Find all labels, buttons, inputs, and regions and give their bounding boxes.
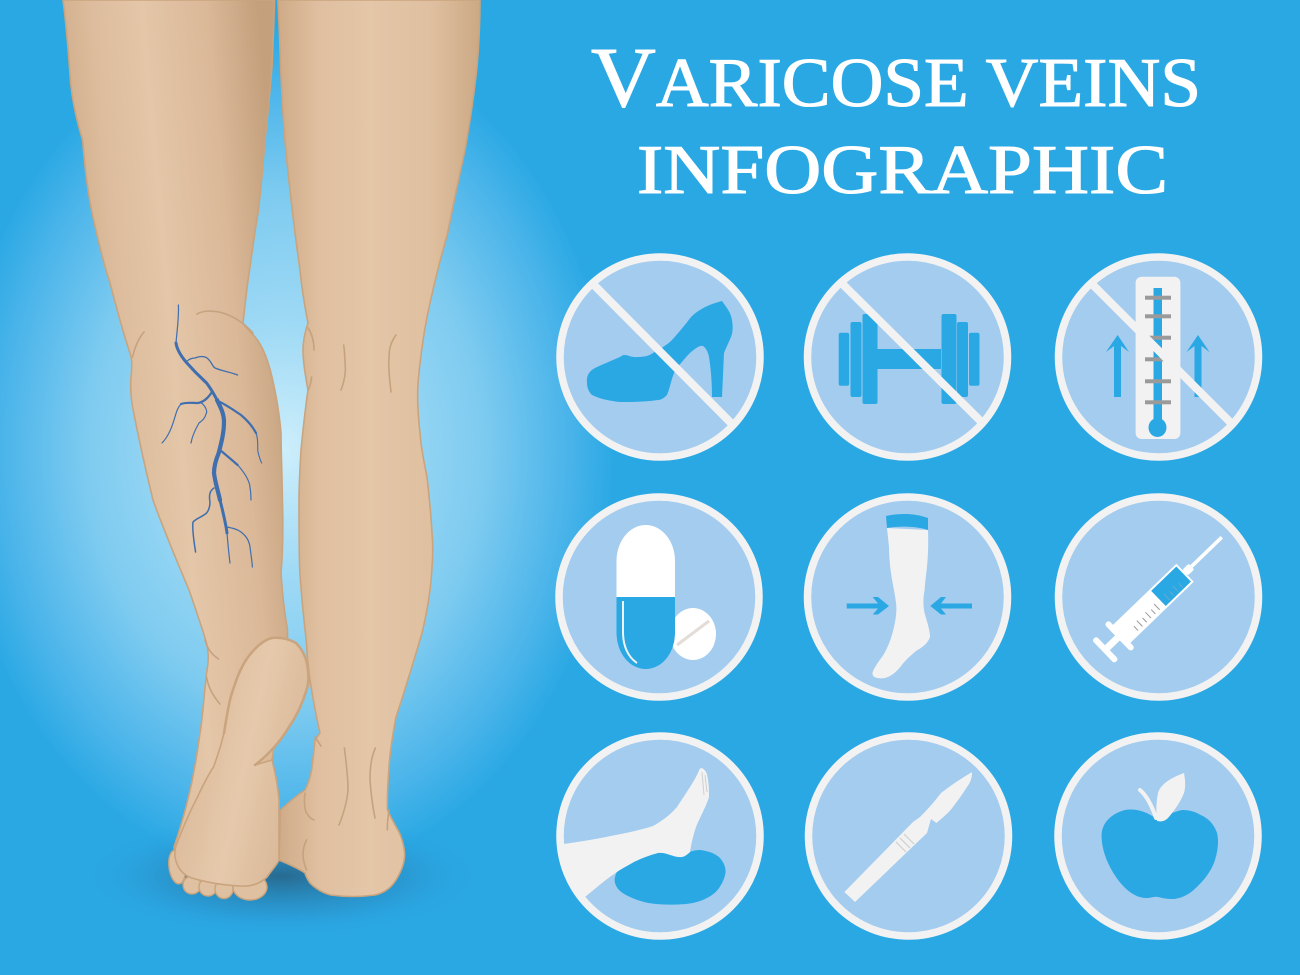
illustration: legs [63, 0, 480, 900]
veins [162, 305, 262, 567]
icon: no high heels [560, 257, 760, 457]
left leg with varicose veins [63, 0, 288, 880]
icon: healthy apple [1058, 736, 1258, 936]
title line 2: INFOGRAPHIC [637, 132, 1168, 209]
right leg [278, 0, 480, 896]
title line 1: VARICOSE VEINS [591, 29, 1201, 125]
icon: scalpel surgery [808, 736, 1008, 936]
icon: foot elevation on cushion [560, 736, 760, 936]
title [591, 29, 1201, 209]
icon: syringe injection [1058, 497, 1258, 697]
raised foot sole [175, 638, 308, 886]
icon: no heavy lifting [808, 257, 1008, 457]
icon: compression stocking [808, 497, 1008, 697]
toes of raised foot [167, 849, 267, 900]
icon: no heat [1058, 257, 1258, 457]
feet shadow [77, 814, 487, 938]
icon: medication pills [559, 497, 759, 697]
